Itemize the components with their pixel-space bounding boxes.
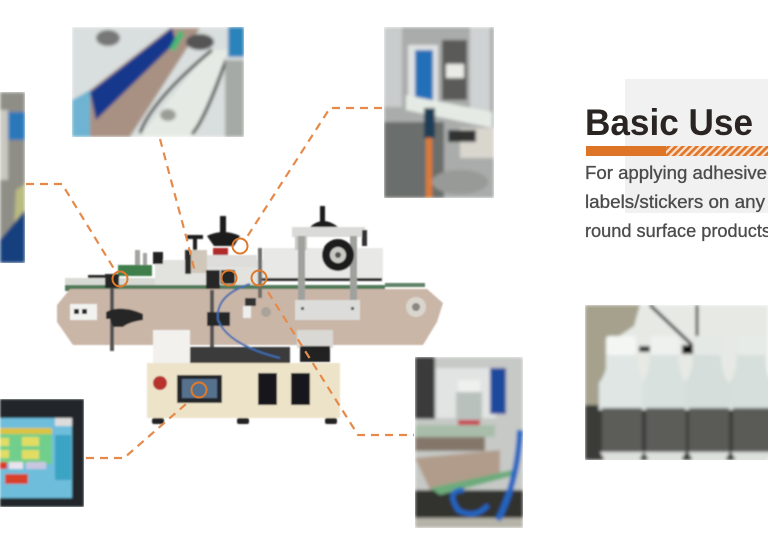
connector: lower photo to post: [268, 292, 414, 435]
callout rings on machine: [112, 238, 266, 398]
photo: left edge machine close-up: [0, 92, 25, 263]
connector: touch screen photo to panel: [86, 404, 186, 458]
blue air hoses: [218, 284, 280, 358]
description text: round surface products: [585, 221, 768, 241]
description text: [585, 163, 768, 241]
top roller assembly: [292, 206, 367, 320]
heading: Basic Use: Basic Use: [585, 102, 753, 143]
mid block: [153, 330, 190, 365]
touch screen bezel: [177, 375, 222, 403]
connector: top photo to conveyor: [160, 139, 195, 272]
machine: tabletop labelling machine: [57, 206, 443, 424]
photo: label sensor close-up: [384, 27, 494, 198]
emergency stop: [153, 376, 167, 390]
plate switch and mount: [70, 304, 97, 320]
photo: bottle on conveyor with blue hoses: [415, 357, 523, 528]
green sensor board: [118, 265, 152, 276]
handwheel centre: [185, 216, 240, 274]
connector: left photo to guide knob: [26, 184, 116, 272]
heading underline bar: [586, 146, 768, 156]
photo: labelled bottles: [585, 305, 768, 462]
photo: touch screen interface: [0, 399, 84, 507]
machine back plate: [57, 289, 443, 345]
description text: labels/stickers on any: [585, 192, 765, 212]
dashed connector lines: [26, 108, 414, 458]
photo: conveyor with blue guide: [72, 27, 244, 137]
feet: [152, 418, 164, 424]
vertical posts and clamps: [88, 248, 262, 351]
switch panels: [258, 373, 277, 405]
base cabinet: [147, 363, 340, 418]
description text: For applying adhesive: [585, 163, 767, 183]
background panel: heading backdrop: [625, 79, 768, 213]
machine upper deck: [65, 278, 155, 286]
connector: side photo to sensor: [245, 108, 382, 240]
central pulley: [261, 307, 271, 317]
right plate bearing: [406, 297, 426, 317]
